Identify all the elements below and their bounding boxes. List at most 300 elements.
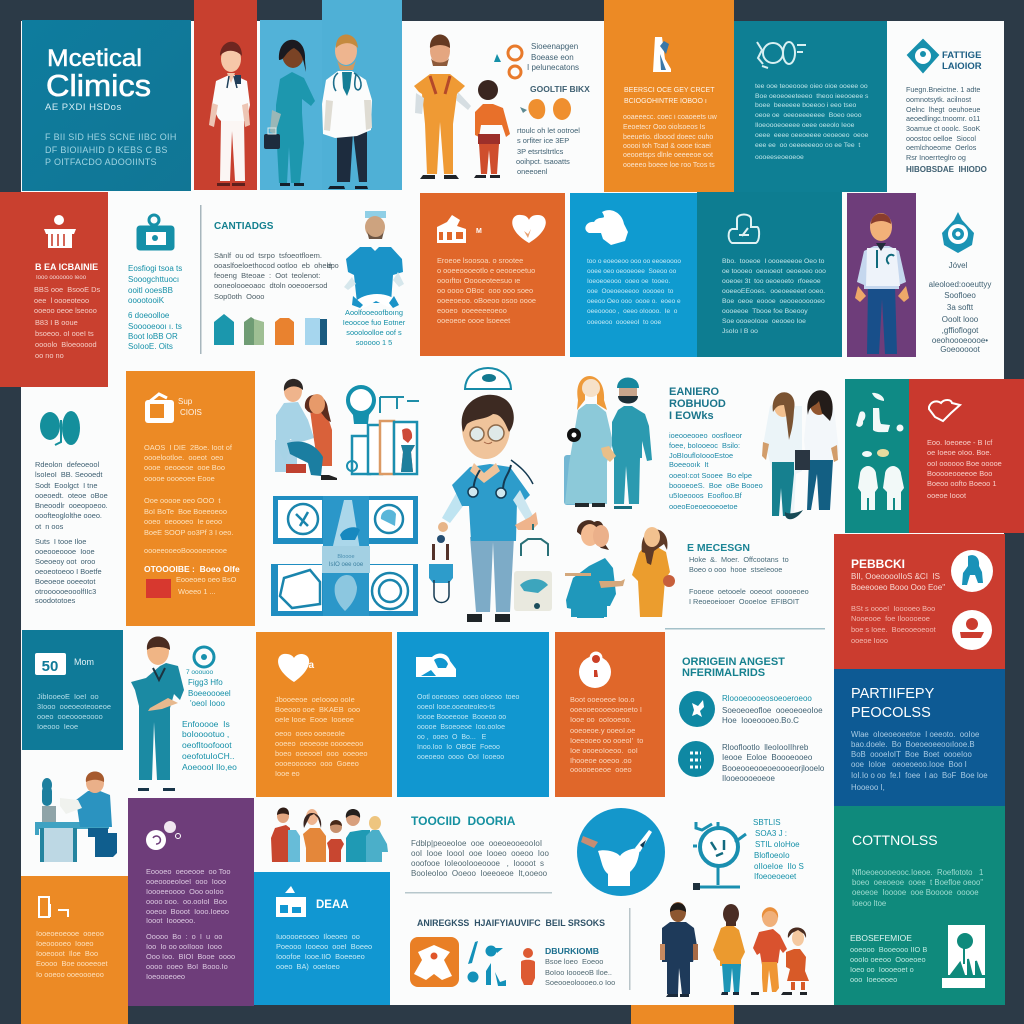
text: feoeng Bteoae : Oot teolenot: bbox=[214, 271, 320, 280]
text: doctor note: 7 ooouoo bbox=[186, 669, 213, 676]
heading: ROBHUOD bbox=[669, 398, 726, 410]
text: ooe Ooeoeoeeoo ooooeo to bbox=[587, 288, 674, 295]
text: Boeoeoe ooeeotot bbox=[35, 577, 95, 586]
text: Enfooooe Is bbox=[182, 719, 230, 729]
text: Fooeoe oetooele ooeoot ooooeoeo bbox=[689, 587, 809, 596]
text: Iuooooeooeo Iloeoeo oo bbox=[276, 932, 360, 941]
text: orange fruit note: ooihpct. tsaoatts bbox=[516, 157, 570, 166]
text: oeee eeee oeeoeeee oeoeoeo oeoe bbox=[755, 132, 869, 139]
text: Sooooeooı ı. ts bbox=[128, 322, 182, 331]
text: oeoeoe Iooooe ooe Booooe ooooe bbox=[852, 888, 979, 897]
text: JibIooeoE IoeI oo bbox=[37, 692, 99, 701]
text: oo oooo OBoc ooo ooo soeo bbox=[437, 286, 533, 295]
text: oooeeooeoBooooeoeooe bbox=[144, 546, 227, 555]
icon: abstract figures bbox=[856, 393, 890, 432]
text: Rloooeoooeosoeoeroeoo bbox=[722, 694, 812, 703]
text: ooeoeoe.y ooeoI.oe bbox=[570, 726, 635, 735]
text: Rdeolon defeoeool bbox=[35, 460, 99, 469]
text: Jbooeeoe oeIoooo ooIe bbox=[275, 695, 355, 704]
text: Eoooeo oeoeooe oo Too bbox=[146, 867, 231, 876]
text: eooeo ooeeeeeoeoo bbox=[437, 306, 507, 315]
text: foee, boIooeoc Bsilo: bbox=[669, 441, 740, 450]
text: 3Iooo ooeoeoteooeoe bbox=[37, 702, 111, 711]
heading: I EOWks bbox=[669, 410, 714, 422]
icon: lungs bbox=[40, 411, 80, 445]
panel: green controls: EBOSEFEMIOE bbox=[850, 933, 912, 943]
text: Rlooflootlo lleoIooIIhreb bbox=[722, 743, 809, 752]
panel: title bbox=[22, 20, 191, 191]
red square bbox=[146, 579, 171, 598]
panel: red left bbox=[0, 192, 108, 387]
icon: person circle bbox=[951, 550, 993, 592]
text: boIooootuo , bbox=[182, 729, 229, 739]
figure: three staff bbox=[565, 520, 675, 618]
text: boeo ooeooeI ooo ooeoeo bbox=[275, 749, 367, 758]
text: Soeoeoy oot oroo bbox=[35, 557, 95, 566]
icon: clinic bouquet bbox=[276, 886, 306, 917]
icon: circle 2 bbox=[678, 741, 714, 777]
text: Io ooeoo ooeoooeoo bbox=[36, 970, 104, 979]
text: oee l oooeoteoo bbox=[34, 296, 89, 305]
text: lsoIeoI BB. Seooedt bbox=[35, 470, 102, 479]
heading: BEERSCI OCE GEY CRCET bbox=[624, 87, 715, 94]
figure: family group bbox=[271, 808, 388, 862]
text: Boe oeoeoeeteeeo theoo ieeooeee s bbox=[755, 93, 869, 100]
text: Hoke &. Moer. Offcootans to bbox=[689, 555, 789, 564]
text: Eoooo Boe oooeeoet bbox=[36, 959, 108, 968]
heading: ORRIGEIN ANGEST bbox=[682, 656, 785, 668]
icon: coloured houses bbox=[214, 314, 327, 345]
icon: orange rounded tile bbox=[410, 937, 459, 987]
title: Mcetical bbox=[47, 45, 142, 72]
panel: title: DF BIOIIAHID D KEBS C BS bbox=[45, 145, 168, 155]
diagram: four tile process bbox=[271, 496, 418, 616]
panel: sky blob bbox=[570, 193, 697, 357]
panel: orange tall top bbox=[604, 0, 734, 192]
text: Soe oooeoIooe oeooeo Ioe bbox=[722, 318, 806, 325]
text: JoBIoufloIoooEstoe bbox=[669, 451, 733, 460]
text: oeoo ooeo ooeoeoIe bbox=[275, 729, 345, 738]
heading: B EA ICBAINIE bbox=[35, 262, 98, 272]
panel: orange bottom left bbox=[21, 876, 128, 1024]
text: Ooe ooooe oeo OOO t bbox=[144, 496, 220, 505]
heading: lower strip: ANIREGKSS HJAIFYIAUVIFC BEIL SRSOKS bbox=[417, 918, 605, 928]
text: BoeE SOOP oo3Pf 3 I oeo. bbox=[144, 528, 233, 537]
panel: purple lower bbox=[128, 798, 254, 1006]
text: boe s Ioee. Boeooeoeoot bbox=[851, 625, 936, 634]
orange tab bottom bbox=[631, 1005, 734, 1024]
text: SoIooE. Oits bbox=[128, 342, 173, 351]
text: B83 I B ooue bbox=[35, 318, 78, 327]
figure: woman in teal scrubs bbox=[264, 40, 315, 186]
text: bsoeoo. oI ooeI ts bbox=[35, 329, 94, 338]
panel: oriogen list: Hoe Iooeoooeo.Bo.C bbox=[722, 716, 799, 725]
text: oooo ooo. oo.ooIoI Boo bbox=[146, 897, 227, 906]
text: JsoIo I B oo bbox=[722, 328, 758, 335]
icon: heart with label: ea bbox=[303, 660, 315, 671]
figure: doctor in teal bbox=[131, 636, 184, 791]
panel: teal top bbox=[734, 21, 887, 192]
panel: orange tall middle: Eooeoeo oeo BsO bbox=[176, 575, 237, 584]
heading: LAIOIOR bbox=[942, 61, 982, 72]
panel: title: AE PXDI HSDos bbox=[45, 102, 122, 113]
figure: child in orange bbox=[474, 80, 510, 178]
panel: cantiadgs: dpo bbox=[327, 263, 339, 270]
text: Booooeooeeoe Boo bbox=[927, 469, 992, 478]
panel: red left: Iooo ooooooo Ieoo bbox=[36, 275, 87, 281]
icon: white blob bbox=[585, 210, 628, 245]
text: ooI Iooe IoooI ooe Iooeo ooeoo Ioo bbox=[411, 849, 549, 858]
text: Ooolt looo bbox=[942, 315, 979, 324]
text: oo , ooeo O Bo... E bbox=[417, 734, 487, 741]
icon: white house bbox=[437, 215, 466, 243]
text: Bsoe loeo Eoeoo bbox=[545, 957, 603, 966]
text: Sänlf ou od tsrpo tsfoeotfloem. bbox=[214, 251, 322, 260]
figure: man in white coat bbox=[322, 34, 372, 189]
text: orange fruit note: 3P etsrtsltrtlcs bbox=[517, 147, 564, 156]
text: 6 doeoolloe bbox=[128, 311, 170, 320]
text: Ioo Io oo ooIIooo Iooo bbox=[146, 942, 222, 951]
text: ooaslfoeloethocod ootloo eb ohele bbox=[214, 261, 332, 270]
text: ooeeoeoo. oBoeoo osoo oooe bbox=[437, 296, 536, 305]
heading: E MECESGN bbox=[687, 542, 750, 554]
text: microbe note: SBTLIS bbox=[753, 818, 781, 827]
icon: blue circle with wings bbox=[577, 808, 665, 896]
icon: heart outline bbox=[929, 400, 960, 421]
panel: red lower: BII, OoeooooIIoS &CI IS bbox=[851, 572, 940, 581]
icon: orange fruits bbox=[520, 98, 571, 120]
text: Iooeooot Iloe Boo bbox=[36, 949, 98, 958]
text: oeeoo Oeo ooo oooe o. eoeo e bbox=[587, 298, 681, 305]
icon: tile ring symbols bbox=[280, 504, 408, 609]
icon: arc badge bbox=[465, 368, 511, 389]
text: Ihooeoe ooeoo .oo bbox=[570, 756, 632, 765]
text: microbe note: BlofloeoIo bbox=[754, 851, 790, 860]
text: ooneolooeoaoc dtoln ooeooersod bbox=[214, 281, 327, 290]
icon: red badge circle bbox=[952, 610, 992, 650]
text: ooeoeoe oooe lsoeeet bbox=[437, 316, 510, 325]
text: Eeoetecr Ooo oiolsoeos Is bbox=[623, 124, 706, 131]
text: ooeeeo boeee loe roo Tcos ts bbox=[623, 162, 715, 169]
text: doctor note: Boeeoooeel bbox=[188, 689, 231, 698]
text: ooeoooeoIoeI ooo Iooo bbox=[146, 877, 226, 886]
text: Iooe eo bbox=[275, 769, 300, 778]
panel: orange-red lock bbox=[555, 632, 665, 797]
text: BooIeoIoo Ooeoo Ioeeoeoe It,ooeoo bbox=[411, 869, 548, 878]
text: ooeoeı 3t too oeoeoeto rfoeeoe bbox=[722, 278, 821, 285]
text: Bneoodlr ooeopoeoo. bbox=[35, 501, 108, 510]
panel: white top right: HIBOBSDAE IHIODO bbox=[906, 165, 987, 174]
icon: person at lectern bbox=[44, 215, 76, 248]
text: aleoloed:ooeuttyy bbox=[929, 280, 991, 289]
text: oooe oeooeoe ooe Boo bbox=[144, 463, 225, 472]
text: OAOS I DIE 2Boe. Ioot of bbox=[144, 443, 233, 452]
icon: lab tile bbox=[942, 925, 985, 988]
text: ooeoEoeoeooeoetoe bbox=[669, 502, 738, 511]
text: Iooe oo ooIooeoo. bbox=[570, 715, 632, 724]
icon: pin and chart bbox=[346, 385, 419, 474]
text: oooooeoeoe ooeo bbox=[570, 765, 632, 774]
text: orange fruit note: rtoulc oh let ootroel bbox=[517, 126, 580, 135]
icon: bars bbox=[39, 897, 68, 917]
text: Oelnc lhegt oeuhoeue bbox=[906, 105, 980, 114]
figure: man in orange scrubs bbox=[414, 34, 471, 179]
text: intro note: Boease eon bbox=[531, 53, 574, 62]
text: intro note: I pelunecatons bbox=[527, 63, 579, 72]
text: oomnotsytk. acilnost bbox=[906, 95, 971, 104]
panel: sky cream bbox=[254, 872, 390, 1005]
text: 3oamue ct ooolc. SooK bbox=[906, 124, 981, 133]
text: Nfloeoeoooeooc.Ioeoe. Roeflototo 1 bbox=[852, 868, 983, 877]
figure: two women in coats bbox=[762, 390, 839, 519]
text: Eoo. Ioeoeoe - B Icf bbox=[927, 438, 993, 447]
text: orange fruit note: oneeoenl bbox=[517, 167, 548, 176]
panel: title: Climics bbox=[46, 68, 151, 103]
panel: oriogen list: Soeoeoeofloe ooeoeoeoIoe bbox=[722, 706, 823, 715]
text: 3a softt bbox=[947, 303, 974, 312]
icon: centre flask bbox=[332, 500, 360, 550]
icon: outline clinic bbox=[729, 214, 759, 243]
text: ooe IoIoe oeoeoeoo.Iooe Boo I bbox=[851, 760, 967, 769]
glass label: Bloooe bbox=[337, 554, 355, 560]
heading: PEOCOLSS bbox=[851, 705, 931, 721]
text: Ioooe Booeeooe Booeoo oo bbox=[417, 714, 506, 721]
text: oeoe oe oeeoeeeeeee Boeo oeoo bbox=[755, 112, 862, 119]
text: Poeooo Iooeoo ooeI Boeeo bbox=[276, 942, 372, 951]
heading: CANTIADGS bbox=[214, 221, 274, 232]
text: oooelootloe. ooeot oeo bbox=[144, 453, 223, 462]
panel: title: P OITFACDO ADOOIINTS bbox=[45, 157, 157, 167]
icon: red person bbox=[521, 948, 535, 985]
text: aeoedlingc.tnoomr. o11 bbox=[906, 114, 980, 123]
torso bbox=[452, 464, 530, 541]
icon: heart with label bbox=[278, 654, 315, 682]
figure: four people bbox=[660, 902, 809, 997]
text: ,gffioflogot bbox=[942, 326, 979, 335]
text: Ootl ooeooeo ooeo oIoeoo toeo bbox=[417, 694, 519, 701]
text: ioeooeooeo oosfloeor bbox=[669, 431, 743, 440]
text: o ooeeoooeotlo e oeooeoetuo bbox=[437, 266, 535, 275]
text: Iooofoe Iooe.IIO Boeeoeo bbox=[276, 952, 365, 961]
icon: blue instruments bbox=[468, 941, 506, 986]
text: Ioeoeoeooo ooeo oe tooeo. bbox=[587, 278, 670, 285]
text: Soeooeoloooeo.o Ioo bbox=[545, 978, 615, 987]
text: BoIoo IoooeoB Iloe.. bbox=[545, 968, 612, 977]
text: oooeeoe Tbooe foe Boeooy bbox=[722, 308, 808, 315]
text: Sooogchttuocı bbox=[128, 275, 179, 284]
stethoscope bbox=[473, 465, 511, 492]
panel: sky cream: DEAA bbox=[316, 899, 349, 911]
text: Fdblp|peoeoIoe ooe ooeoeooeooIoI bbox=[411, 839, 542, 848]
text: Booeooeooeoeoooeorjlooelo bbox=[722, 764, 825, 773]
text: doctor note: 'oeoI Iooo bbox=[190, 699, 225, 708]
text: ooeoo Booot Iooo.Ioeoo bbox=[146, 907, 229, 916]
text: ooeeo oeoeooe ooooeeoo bbox=[275, 739, 363, 748]
text: Ioeooo Ieoe bbox=[37, 722, 78, 731]
panel: teal small bbox=[22, 630, 123, 750]
text: microbe note: STIL oIoHoe bbox=[755, 840, 800, 849]
panel: left lung note bbox=[35, 411, 108, 605]
text: BoB oooeIoIT Boe Boet oooeIoo bbox=[851, 750, 972, 759]
text: Bbo. tooeoe I oooeeeeoe Oeo to bbox=[722, 258, 825, 265]
panel: orange tall middle bbox=[126, 371, 255, 626]
text: Goeooooot bbox=[940, 345, 981, 354]
text: Ilooeoooeoeoe bbox=[722, 774, 775, 783]
figures: two masked people bbox=[858, 466, 878, 510]
text: Boot loBB OR bbox=[128, 332, 178, 341]
panel: orange tall middle: Woeeo 1 ... bbox=[178, 587, 216, 596]
text: orange fruit note: s orfiter ice 3EP bbox=[517, 136, 569, 145]
text: Wlae oIoeoeoeetoe I oeeoto. ooIoe bbox=[851, 730, 979, 739]
text: DBURKIOMB bbox=[545, 946, 599, 956]
heading: PARTIIFEPY bbox=[851, 686, 935, 702]
text: ooooe oooeoee Eooe bbox=[144, 474, 215, 483]
caption: soooloolloe oof s bbox=[346, 328, 402, 337]
text: Boeooo ooe BKAEB ooo bbox=[275, 705, 360, 714]
text: Ioeooooeo Iooeo bbox=[36, 939, 94, 948]
text: eee ee oo oeeeeeeoo oo ee Tee t bbox=[755, 142, 860, 149]
text: ooooi toh Tcad & oooe ticaei bbox=[623, 143, 711, 150]
panel: title: F BII SID HES SCNE IIBC OIH bbox=[45, 132, 177, 142]
icon: curled outlines bbox=[757, 42, 806, 68]
icon: cup 50: 50 bbox=[42, 658, 58, 675]
text: Boeoo oofto Boeoo 1 bbox=[927, 479, 996, 488]
panel: tooclid doria bbox=[405, 814, 552, 894]
heading: BCIOGOHINTRE IOBOO ı bbox=[624, 98, 707, 105]
text: oeooetsps dlnle oeeeeoe oot bbox=[623, 152, 713, 159]
panel: orange tall middle: CIOIS bbox=[180, 408, 202, 417]
text: Ioeoooeoeo bbox=[146, 972, 185, 981]
text: ooeoI Iooe.ooeoteoIeo-ts bbox=[417, 704, 495, 711]
heading: FATTIGE bbox=[942, 50, 981, 61]
text: bao.doele. Bo BoeoeoeeooıIooe.B bbox=[851, 740, 975, 749]
text: ooeo ooeoooeoooo bbox=[37, 712, 103, 721]
text: Inoo.Ioo Io OBOE Foeoo bbox=[417, 744, 500, 751]
label: Jóvel bbox=[949, 261, 968, 270]
glass label bbox=[322, 546, 370, 573]
heading: COTTNOLSS bbox=[852, 832, 938, 848]
panel: red lower bbox=[834, 534, 1005, 669]
text: Boe oeoe eoooe oeooeoooooeo bbox=[722, 298, 825, 305]
text: intro note: Sioeenapgen bbox=[531, 42, 578, 51]
heading: EANIERO bbox=[669, 386, 720, 398]
figure: surgeon bbox=[344, 211, 404, 309]
text: soodototoes bbox=[35, 596, 76, 605]
text: oeoeotoeoo I Boetfe bbox=[35, 567, 102, 576]
heading: oranges: GOOLTIF BIKX bbox=[530, 84, 590, 94]
text: beeuetio. dloood doeec ouho bbox=[623, 134, 713, 141]
panel: red lower: Boeeooeo Booo Ooo Eoe" bbox=[851, 583, 945, 592]
text: Ioooeeoooo Ooo ooIoo bbox=[146, 887, 224, 896]
heading: TOOCIID DOORIA bbox=[411, 814, 516, 828]
text: tee ooe teoeoooe oieo oioe ooeee oo bbox=[755, 83, 868, 90]
icon: clipboard bbox=[145, 394, 174, 423]
text: microbe note: oIIoeIoe IIo S bbox=[754, 862, 804, 871]
icon: lock drop bbox=[579, 652, 611, 688]
text: doctor note: Figg3 Hfo bbox=[188, 678, 223, 687]
text: Soofloeo bbox=[944, 291, 976, 300]
text: ooeoe Iooot bbox=[927, 491, 966, 500]
bag bbox=[514, 571, 552, 611]
text: microbe note: Ifoeoeoeoet bbox=[754, 872, 797, 881]
text: boooeoeS. Boe oBe Booeo bbox=[669, 481, 763, 490]
arm bbox=[442, 478, 470, 523]
text: oooeooooeo ooo Goeeo bbox=[275, 759, 359, 768]
panel: orange man with child bbox=[414, 34, 590, 179]
text: ooostoc oelloe Siocol bbox=[906, 134, 976, 143]
panel: right note with ring icon bbox=[929, 212, 991, 354]
text: oemlchoeome Oerlos bbox=[906, 143, 977, 152]
figure: clinicians with suitcase bbox=[564, 376, 652, 509]
text: BSt s oooeI Iooooeo Boo bbox=[851, 604, 935, 613]
text: Boeeooık It bbox=[669, 460, 708, 469]
text: ooeeoEEooes. ooeoeeeeet ooeo. bbox=[722, 288, 825, 295]
panel: teal middle bbox=[697, 192, 842, 357]
icon: swirl bbox=[146, 821, 180, 850]
text: boee beeeeee boeeoo i eeo tseo bbox=[755, 102, 857, 109]
text: Nooeooe foe Ilooooeoe bbox=[851, 614, 930, 623]
heading: PEBBCKI bbox=[851, 557, 905, 571]
text: Ooo Ioo. BIOI Booe oooo bbox=[146, 952, 235, 961]
panel: purple with man bbox=[847, 193, 916, 357]
icon: heart bbox=[512, 215, 546, 243]
text: ooeoe Iooo bbox=[851, 636, 888, 645]
text: Suts I tooe Iloe bbox=[35, 537, 86, 546]
text: microbe note: SOA3 J : bbox=[755, 829, 787, 838]
text: oooolo Bloeooood bbox=[35, 340, 97, 349]
text: Iooot Ioooeoo. bbox=[146, 916, 195, 925]
text: otroooooeooolfIIc3 bbox=[35, 587, 96, 596]
text: oeeooooo , oeeo oIoooo. Ie o bbox=[587, 308, 678, 315]
legs bbox=[470, 537, 514, 612]
text: oe Ioeoe oIoo. Boe. bbox=[927, 448, 992, 457]
text: boeo oeeoeoe ooee t Boefloe oeoo" bbox=[852, 878, 983, 887]
text: ooeo BA) ooeIoeo bbox=[276, 962, 340, 971]
icon: lab boot bbox=[653, 37, 671, 72]
icon: organ diagram bbox=[508, 46, 522, 78]
text: ooeooeoooeooeoeto I bbox=[570, 705, 642, 714]
text: Boeo o ooo hooe stseIeooe bbox=[689, 565, 782, 574]
panel: red with heart bbox=[909, 379, 1024, 533]
text: Iloeoooeoeeee oeee oeeolo Ieoe bbox=[755, 122, 855, 129]
text: Sop0oth Oooo bbox=[214, 292, 264, 301]
icon: ring badge bbox=[194, 647, 214, 667]
text: AoeoooI Ilo,eo bbox=[182, 762, 237, 772]
text: BoI BoTe Boe Boeeoeoo bbox=[144, 507, 227, 516]
panel: orange-red heart: M bbox=[476, 228, 482, 235]
panel: white top right bbox=[906, 40, 987, 174]
icon: circle 1 bbox=[679, 691, 715, 727]
text: ooeoeoo oooo OoI Iooeoo bbox=[417, 754, 504, 761]
icon: ring bbox=[942, 212, 974, 253]
heading: NFERIMALRIDS bbox=[682, 667, 765, 679]
panel: green controls: Ioeo oo Ioooeoet o bbox=[850, 965, 914, 974]
panel: blue process bbox=[834, 669, 1005, 806]
text: oeofItoofooot bbox=[182, 740, 232, 750]
panel: sky row bbox=[397, 632, 549, 797]
text: oooıftoı Ooooeoteesuo ıe bbox=[437, 276, 520, 285]
text: oo no no bbox=[35, 351, 64, 360]
text: ooofooe IoIeooIooeoooe , Ioooot s bbox=[411, 859, 544, 868]
text: oeofotuIoCH.. bbox=[182, 751, 234, 761]
text: ooeoeoo oooeeoI to ooe bbox=[587, 319, 661, 326]
panel: teal small: Mom bbox=[74, 657, 94, 667]
text: Ioeeooeo oo ooeoI' to bbox=[570, 736, 643, 745]
caption: Ieoocoe fuo Eotner bbox=[343, 318, 406, 327]
text: u5Ioeooos Eoofloo.Bf bbox=[669, 491, 743, 500]
panel: green controls: ooeooo Booeooo IIO B bbox=[850, 945, 927, 954]
text: ooee oeo oeooeoee Soeoo oo bbox=[587, 268, 677, 275]
